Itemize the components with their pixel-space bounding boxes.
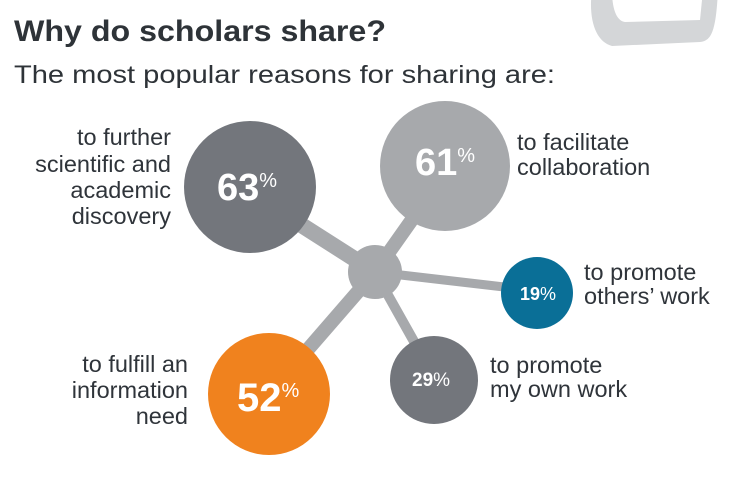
bubble: 63%: % — [259, 170, 277, 192]
bubble: 61% — [380, 101, 510, 231]
label: information need — [72, 351, 188, 429]
bubble: 61%: 61 — [415, 142, 457, 184]
label: own work — [490, 352, 627, 402]
label: collaboration: to facilitate — [517, 129, 629, 155]
label: information need: need — [136, 403, 188, 429]
label: discovery: academic — [70, 177, 171, 203]
hub — [348, 245, 402, 299]
bubble: 29%: 29% — [412, 370, 450, 391]
label: others' work: to promote — [584, 259, 696, 285]
label: discovery: to further — [77, 124, 171, 150]
label: discovery: discovery — [72, 203, 171, 229]
label: collaboration: collaboration — [517, 154, 650, 180]
bubble: 19%: 19% — [520, 284, 556, 304]
label: discovery: scientific and — [35, 151, 171, 177]
bubble: 19% — [501, 257, 573, 329]
connectors — [270, 180, 530, 370]
label: collaboration — [517, 129, 650, 180]
bubble: 61%: % — [457, 145, 475, 167]
bubble: 63% — [184, 121, 316, 253]
bubble: 52% — [208, 333, 330, 455]
bubble: 29% — [390, 336, 478, 424]
label: others' work — [584, 259, 710, 309]
bubble: 52%: 52 — [237, 376, 282, 420]
label: own work: to promote — [490, 352, 602, 378]
title: Why do scholars share? — [14, 15, 386, 48]
label: information need: information — [72, 377, 188, 403]
label: information need: to fulfill an — [82, 351, 188, 377]
bubble: 63%: 63 — [217, 167, 259, 209]
label: others' work: others’ work — [584, 283, 710, 309]
subtitle: The most popular reasons for sharing are: — [14, 61, 555, 89]
label: discovery — [35, 124, 171, 229]
bubble: 52%: % — [282, 380, 300, 402]
label: own work: my own work — [490, 376, 627, 402]
icon: decorative device frame — [591, 0, 718, 46]
